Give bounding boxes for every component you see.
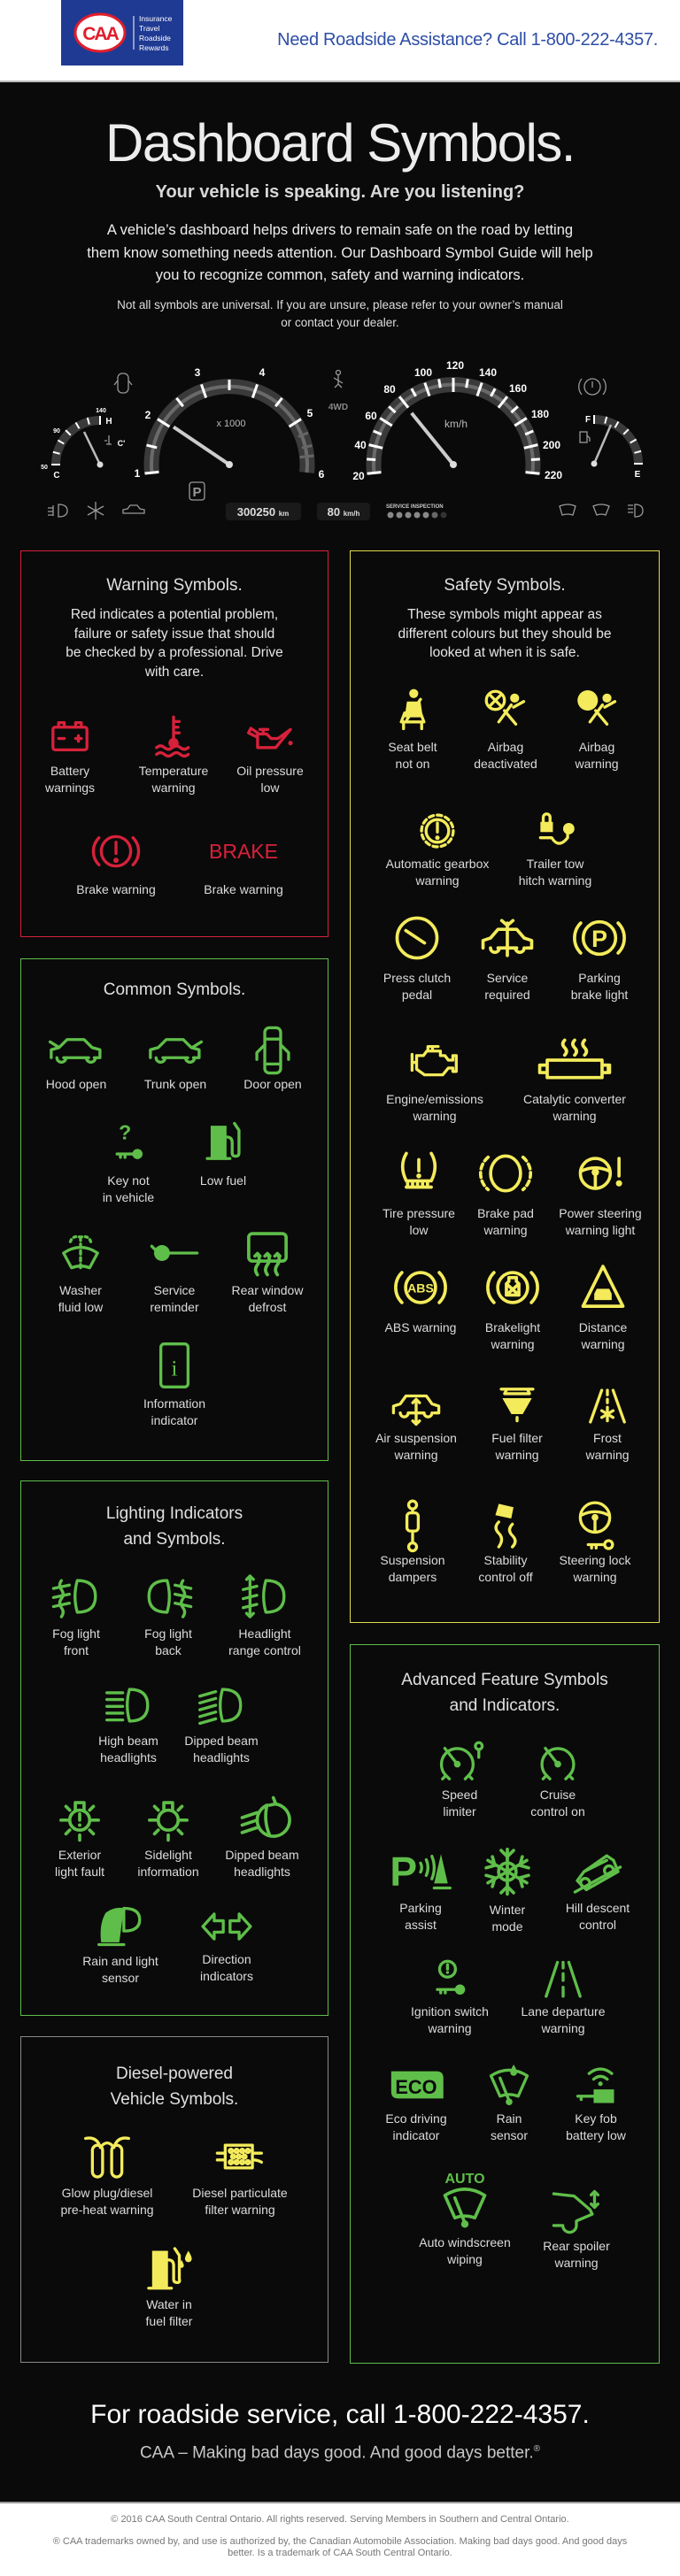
icon: service reminder: [150, 1244, 199, 1314]
icon: eco driving: indicator: [393, 2128, 439, 2142]
dashboard gauges illustration: km/h: [444, 418, 468, 430]
dashboard gauges illustration: 160: [509, 382, 527, 395]
panel: common symbols: [20, 958, 328, 1461]
icon: water in fuel filter: Water in: [146, 2297, 192, 2311]
icon: high beam: [62, 1688, 195, 1766]
icon: ABS: ABS warning: [385, 1320, 456, 1334]
footer legal: [0, 2502, 680, 2576]
icon: information: indicator: [151, 1413, 197, 1427]
icon: power steering: Power steering: [559, 1206, 642, 1220]
dashboard gauges illustration: 5: [307, 407, 313, 419]
icon: fog light back: back: [155, 1643, 182, 1657]
trademark text: [0, 2536, 680, 2559]
logo: CAA: Travel: [139, 24, 159, 33]
dashboard gauges illustration: 4: [259, 366, 266, 379]
icon: rear window defrost: [232, 1232, 303, 1314]
icon: sidelight: information: [137, 1865, 199, 1879]
dashboard gauges illustration: 6: [319, 468, 325, 481]
text: safety description: different colours but they should be: [398, 627, 611, 642]
icon: glow plug: pre-heat warning: [60, 2203, 154, 2217]
dashboard gauges illustration: F: [585, 415, 591, 425]
icon: battery: [45, 721, 95, 795]
title: Dashboard Symbols.: [105, 113, 575, 173]
icon: suspension dampers: [380, 1499, 445, 1584]
icon: direction indicators: indicators: [200, 1969, 253, 1983]
icon: temperature: Temperature: [139, 764, 208, 778]
icon: key fob battery: [529, 2067, 662, 2144]
icon: information: [108, 1346, 241, 1429]
text: warning description: [66, 607, 283, 680]
icon: tire pressure: [382, 1152, 455, 1237]
icon: BRAKE text: Brake warning: [204, 882, 283, 896]
icon: parking brake: [571, 920, 629, 1002]
icon: catalytic converter: Catalytic converter: [523, 1092, 626, 1106]
text: safety description: These symbols might appear as: [407, 607, 602, 622]
icon: brake pad: warning: [483, 1223, 528, 1237]
heading: advanced feature symbols: Advanced Feature Symbols: [401, 1671, 608, 1689]
dashboard gauges illustration: 100: [414, 366, 432, 379]
icon: key not in vehicle: ?: [119, 1120, 131, 1143]
icon: fog light back: Fog light: [144, 1626, 192, 1641]
icon: automatic gearbox: Automatic gearbox: [386, 857, 489, 871]
header bar: [0, 0, 680, 82]
icon: water in fuel filter: [103, 2249, 236, 2330]
icon: temperature: warning: [151, 780, 196, 795]
icon: glow plug: Glow plug/diesel: [62, 2186, 152, 2200]
dashboard gauges illustration: E: [635, 470, 641, 480]
icon: eco driving: [350, 2067, 483, 2144]
icon: speed limiter: [393, 1744, 526, 1820]
icon: service required: required: [484, 988, 530, 1002]
icon: dipped beam: Dipped beam: [184, 1734, 259, 1748]
icon: frost warning: Frost: [593, 1431, 622, 1445]
header phone text: Need Roadside Assistance? Call 1-800-222-4357.: [277, 30, 658, 50]
icon: key fob battery: battery low: [566, 2128, 626, 2142]
icon: ABS: [384, 1271, 456, 1334]
icon: steering lock: Steering lock: [560, 1553, 630, 1567]
heading: warning symbols: Warning Symbols.: [106, 576, 243, 595]
icon: door open: Door open: [243, 1077, 302, 1091]
icon: rain sensor: sensor: [491, 2128, 528, 2142]
icon: brakelight: [485, 1271, 540, 1351]
icon: brakelight: Brakelight: [485, 1320, 540, 1334]
icon: eco driving: Eco driving: [385, 2111, 447, 2126]
icon: seat belt: not on: [396, 757, 429, 771]
icon: ignition switch: [383, 1963, 516, 2037]
icon: diesel particulate filter: filter warning: [205, 2203, 275, 2217]
heading: lighting indicators: Lighting Indicators: [106, 1504, 243, 1523]
text: warning description: be checked by a professional. Drive: [66, 645, 283, 660]
icon: information: Information: [143, 1396, 205, 1411]
icon: airbag warning: warning: [575, 757, 619, 771]
icon: rain and light sensor: sensor: [102, 1971, 139, 1985]
icon: lane departure: [497, 1963, 630, 2037]
icon: automatic gearbox: warning: [415, 873, 460, 888]
icon: fuel filter: Fuel filter: [491, 1431, 543, 1445]
icon: rear spoiler: warning: [554, 2256, 599, 2270]
dashboard gauges illustration: 1: [135, 467, 141, 480]
logo: CAA: Insurance: [139, 14, 173, 23]
icon: press clutch: Press clutch: [383, 971, 451, 985]
icon: engine: Engine/emissions: [386, 1092, 483, 1106]
dashboard gauges illustration: 90: [53, 428, 60, 434]
icon: rear spoiler: Rear spoiler: [543, 2239, 610, 2253]
icon: low fuel: Low fuel: [200, 1173, 246, 1188]
heading: advanced feature symbols: and Indicators.: [450, 1696, 560, 1715]
dashboard gauges illustration: 80 km/h: [328, 505, 359, 519]
icon: high beam: headlights: [100, 1750, 157, 1765]
heading: diesel symbols: Diesel-powered: [116, 2065, 233, 2083]
heading: lighting indicators: and Symbols.: [123, 1530, 226, 1549]
icon: direction indicators: [160, 1909, 293, 1985]
icon: service reminder: reminder: [150, 1300, 199, 1314]
icon: air suspension: Air suspension: [375, 1431, 457, 1445]
icon: hill descent: Hill descent: [566, 1901, 630, 1915]
dashboard gauges illustration: 20: [352, 470, 365, 482]
dashboard gauges illustration: 3: [195, 366, 201, 379]
text: warning description: failure or safety issue that should: [74, 627, 274, 642]
icon: fog light front: front: [64, 1643, 89, 1657]
copyright text: © 2016 CAA South Central Ontario. All rights reserved. Serving Members in Southern and Central Ontario.: [111, 2514, 569, 2525]
icon: winter mode: Winter: [490, 1903, 525, 1917]
text: warning description: Red indicates a potential problem,: [71, 607, 278, 622]
dashboard gauges illustration: 200: [543, 439, 560, 451]
icon: key fob battery: Key fob: [575, 2111, 617, 2126]
icon: suspension dampers: Suspension: [380, 1553, 445, 1567]
icon: auto windscreen wiping: Auto windscreen: [419, 2235, 511, 2249]
intro paragraph: you to recognize common, safety and warning indicators.: [156, 267, 524, 283]
icon: distance warning: Distance: [579, 1320, 627, 1334]
icon: hill descent: control: [579, 1918, 616, 1932]
dashboard gauges illustration: 140: [479, 366, 497, 379]
icon: distance warning: [579, 1265, 627, 1351]
icon: rear window defrost: defrost: [249, 1300, 286, 1314]
icon: steering lock: warning: [573, 1570, 617, 1584]
icon: press clutch: pedal: [402, 988, 432, 1002]
icon: automatic gearbox: [386, 813, 489, 888]
icon: washer fluid: fluid low: [58, 1300, 103, 1314]
icon: headlight range: range control: [228, 1643, 301, 1657]
dashboard gauges illustration: C': [118, 439, 125, 448]
icon: brake pad: Brake pad: [477, 1206, 534, 1220]
icon: air suspension: [375, 1395, 457, 1462]
icon: parking brake: P: [591, 926, 607, 952]
icon: trailer tow hitch: Trailer tow: [527, 857, 583, 871]
icon: air suspension: warning: [394, 1448, 438, 1462]
intro paragraph: A vehicle’s dashboard helps drivers to remain safe on the road by letting: [107, 222, 573, 238]
icon: key not in vehicle: [103, 1120, 154, 1204]
icon: trunk open: Trunk open: [144, 1077, 206, 1091]
icon: oil pressure: Oil pressure: [236, 764, 304, 778]
icon: rain and light sensor: [54, 1907, 187, 1987]
icon: water in fuel filter: fuel filter: [146, 2314, 192, 2328]
heading: diesel symbols: [20, 2061, 328, 2112]
icon: stability control: Stability: [483, 1553, 528, 1567]
icon: rain sensor: [443, 2067, 576, 2144]
trademark text: ® CAA trademarks owned by, and use is authorized by, the Canadian Automobile Association. Making bad days good. And good days: [53, 2536, 627, 2547]
icon: high beam: High beam: [98, 1734, 158, 1748]
dashboard gauges illustration: 220: [545, 469, 562, 481]
icon: tire pressure: low: [409, 1223, 429, 1237]
icon: hill descent: [531, 1852, 664, 1934]
icon: engine: [386, 1045, 483, 1123]
icon: cruise control: control on: [530, 1804, 585, 1819]
icon: BRAKE text: BRAKE: [209, 840, 278, 863]
dashboard gauges illustration: 50: [41, 465, 48, 471]
dashboard gauges illustration: 2: [145, 409, 151, 421]
icon: low fuel: [200, 1122, 246, 1188]
icon: rear spoiler: [510, 2190, 643, 2272]
icon: key not in vehicle: Key not: [107, 1173, 150, 1188]
icon: trailer tow hitch: hitch warning: [519, 873, 591, 888]
icon: lane departure: Lane departure: [522, 2004, 605, 2019]
icon: auto windscreen wiping: [398, 2171, 531, 2268]
icon: lane departure: warning: [541, 2021, 585, 2035]
icon: catalytic converter: [523, 1039, 626, 1123]
icon: brake pad: [477, 1154, 534, 1237]
icon: parking assist: Parking: [399, 1901, 442, 1915]
icon: battery: warnings: [45, 780, 95, 795]
icon: cruise control: [491, 1744, 624, 1820]
heading: common symbols: Common Symbols.: [104, 980, 245, 999]
icon: diesel particulate filter: Diesel particulate: [192, 2186, 288, 2200]
icon: airbag deactivated: [474, 690, 537, 771]
icon: seat belt: [388, 688, 437, 771]
icon: sidelight: Sidelight: [144, 1848, 192, 1862]
dashboard gauges illustration: 180: [531, 408, 549, 420]
text: safety description: [398, 607, 611, 660]
icon: ignition switch: warning: [428, 2021, 472, 2035]
icon: service required: [482, 919, 533, 1002]
icon: headlight range: Headlight: [238, 1626, 291, 1641]
dashboard gauges illustration: 40: [354, 439, 367, 451]
logo: CAA: Rewards: [139, 43, 169, 52]
icon: auto windscreen wiping: wiping: [447, 2252, 483, 2266]
icon: service reminder: Service: [154, 1283, 195, 1297]
icon: engine: warning: [413, 1109, 457, 1123]
icon: fog light front: [10, 1579, 143, 1659]
note: Not all symbols are universal. If you are unsure, please refer to your owner’s manual: [117, 298, 563, 311]
icon: winter mode: [441, 1852, 574, 1935]
logo: CAA: CAA: [82, 24, 120, 44]
icon: parking brake: brake light: [571, 988, 628, 1002]
icon: tire pressure: Tire pressure: [382, 1206, 455, 1220]
icon: dipped beam: headlights: [193, 1750, 250, 1765]
icon: cruise control: Cruise: [540, 1788, 576, 1802]
intro paragraph: [87, 222, 593, 283]
dashboard gauges illustration: C: [53, 471, 60, 481]
icon: eco driving: ECO: [395, 2076, 437, 2098]
dashboard gauges illustration: P: [192, 485, 202, 500]
icon: distance warning: warning: [581, 1337, 625, 1351]
icon: sidelight: [102, 1798, 235, 1880]
icon: power steering: warning light: [566, 1223, 635, 1237]
dashboard gauges illustration: 60: [365, 410, 377, 422]
footer call to action: For roadside service, call 1-800-222-4357.: [90, 2400, 590, 2429]
icon: winter mode: mode: [491, 1919, 523, 1934]
dashboard gauges illustration: 120: [446, 359, 464, 372]
icon: suspension dampers: dampers: [389, 1570, 437, 1584]
footer tagline: CAA – Making bad days good. And good days better.®: [140, 2443, 540, 2462]
icon: information: i: [171, 1356, 178, 1381]
intro paragraph: them know something needs attention. Our Dashboard Symbol Guide will help: [87, 245, 593, 261]
icon: frost warning: warning: [585, 1448, 630, 1462]
heading: diesel symbols: Vehicle Symbols.: [111, 2090, 238, 2109]
icon: trailer tow hitch: [519, 812, 591, 888]
heading: safety symbols: Safety Symbols.: [444, 576, 566, 595]
icon: service required: Service: [487, 971, 528, 985]
logo: CAA: [61, 0, 183, 65]
icon: stability control: [478, 1503, 533, 1584]
dashboard gauges illustration: 300250 km: [237, 505, 289, 519]
icon: brake warning circle: Brake warning: [76, 882, 156, 896]
icon: key not in vehicle: in vehicle: [103, 1190, 154, 1204]
icon: parking assist: [354, 1852, 487, 1934]
icon: ABS: ABS: [407, 1281, 434, 1296]
icon: dipped beam auto: Dipped beam: [225, 1848, 299, 1862]
panel: safety symbols: [350, 550, 660, 1623]
icon: washer fluid: Washer: [59, 1283, 102, 1297]
icon: fog light front: Fog light: [52, 1626, 100, 1641]
icon: speed limiter: limiter: [443, 1804, 476, 1819]
icon: trunk open: [144, 1038, 206, 1091]
icon: airbag deactivated: deactivated: [474, 757, 537, 771]
icon: ignition switch: Ignition switch: [411, 2004, 489, 2019]
icon: rear window defrost: Rear window: [232, 1283, 303, 1297]
icon: hood open: Hood open: [46, 1077, 106, 1091]
subtitle: Your vehicle is speaking. Are you listening?: [156, 182, 524, 202]
icon: brake warning circle: [76, 835, 156, 896]
icon: oil pressure: [236, 727, 304, 795]
icon: parking assist: assist: [405, 1918, 437, 1932]
icon: battery: Battery: [50, 764, 89, 778]
note: or contact your dealer.: [281, 316, 399, 329]
icon: fuel filter: [491, 1388, 543, 1462]
icon: frost warning: [585, 1388, 630, 1462]
icon: fuel filter: warning: [495, 1448, 539, 1462]
icon: door open: [243, 1027, 302, 1091]
dashboard gauges illustration: x 1000: [216, 419, 246, 429]
dashboard gauges illustration: [41, 359, 644, 520]
icon: seat belt: Seat belt: [388, 740, 437, 754]
icon: glow plug: [41, 2137, 174, 2218]
icon: airbag warning: Airbag: [579, 740, 614, 754]
icon: hood open: [46, 1038, 106, 1091]
icon: rain sensor: Rain: [497, 2111, 522, 2126]
icon: parking brake: Parking: [578, 971, 621, 985]
dashboard gauges illustration: 80: [383, 383, 396, 396]
icon: power steering: [559, 1157, 642, 1237]
note: [117, 298, 563, 329]
icon: airbag warning: [575, 690, 619, 771]
icon: BRAKE text: [204, 840, 283, 896]
icon: dipped beam auto: [196, 1798, 328, 1880]
dashboard gauges illustration: H: [105, 417, 112, 427]
heading: advanced feature symbols: [350, 1667, 660, 1719]
icon: headlight range: [198, 1579, 331, 1659]
icon: parking assist: P: [390, 1849, 417, 1895]
trademark text: better. Is a trademark of CAA South Central Ontario.: [228, 2548, 452, 2558]
icon: stability control: control off: [478, 1570, 533, 1584]
dashboard gauges illustration: 140: [96, 408, 106, 414]
icon: diesel particulate filter: [174, 2139, 306, 2218]
icon: exterior light fault: light fault: [55, 1865, 104, 1879]
text: warning description: with care.: [145, 665, 204, 680]
dashboard gauges illustration: 4WD: [328, 403, 348, 412]
icon: auto windscreen wiping: AUTO: [444, 2172, 485, 2187]
icon: dipped beam auto: headlights: [234, 1865, 290, 1879]
logo: CAA: Roadside: [139, 34, 171, 42]
panel: lighting indicators: [20, 1480, 328, 2016]
icon: washer fluid: [58, 1235, 103, 1314]
dashboard gauges illustration: SERVICE INSPECTION: [386, 504, 444, 510]
icon: oil pressure: low: [260, 780, 280, 795]
icon: fog light back: [102, 1579, 235, 1659]
icon: brakelight: warning: [491, 1337, 535, 1351]
icon: airbag deactivated: Airbag: [488, 740, 523, 754]
panel: diesel-powered vehicle symbols: [20, 2036, 328, 2363]
icon: dipped beam: [155, 1688, 288, 1766]
heading: lighting indicators: [20, 1501, 328, 1552]
panel: warning symbols: [20, 550, 328, 937]
icon: direction indicators: Direction: [202, 1952, 251, 1966]
text: safety description: looked at when it is safe.: [429, 645, 580, 660]
icon: rain and light sensor: Rain and light: [82, 1954, 158, 1968]
icon: speed limiter: Speed: [442, 1788, 477, 1802]
panel: advanced feature symbols: [350, 1644, 660, 2364]
icon: steering lock: [560, 1501, 630, 1584]
icon: exterior light fault: Exterior: [58, 1848, 101, 1862]
icon: exterior light fault: [13, 1798, 146, 1880]
icon: press clutch: [383, 917, 451, 1002]
icon: temperature: [139, 715, 208, 795]
icon: catalytic converter: warning: [552, 1109, 597, 1123]
